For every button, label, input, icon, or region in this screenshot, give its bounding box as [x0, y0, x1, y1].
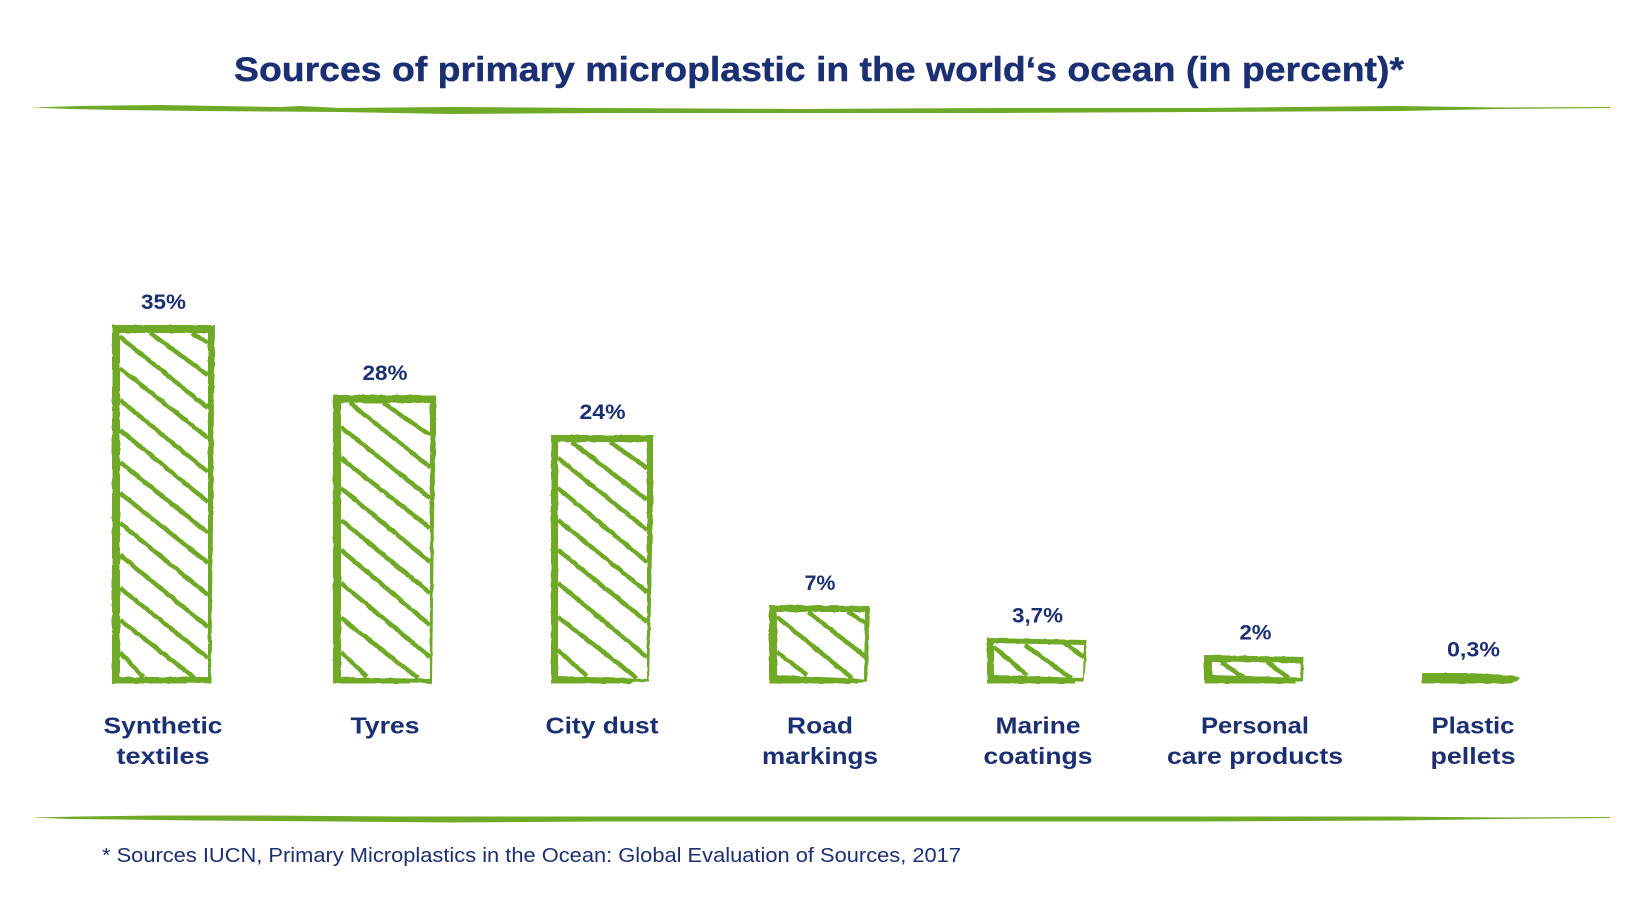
- value label 35%: 35%: [141, 291, 186, 314]
- category label: [984, 712, 1092, 769]
- category label: City dust: [546, 712, 659, 738]
- hatched bar: [551, 435, 653, 684]
- value label 2%: 2%: [1240, 622, 1272, 644]
- value label 7%: 7%: [804, 572, 836, 595]
- category label: textiles: [116, 743, 210, 769]
- bar chart: [104, 291, 1520, 769]
- category label: [762, 712, 878, 769]
- hatched bar: [769, 605, 870, 684]
- category label: care products: [1167, 743, 1343, 769]
- category label: markings: [762, 743, 878, 769]
- bar: marine coatings 3,7%: [984, 604, 1092, 769]
- solid bar: [1422, 673, 1520, 684]
- category label: [1167, 712, 1343, 769]
- bar: tyres 28%: [333, 362, 436, 738]
- category label: Road: [787, 712, 853, 738]
- value label 28%: 28%: [362, 362, 408, 385]
- title: Sources of primary microplastic in the world‘s ocean (in percent)*: [234, 51, 1405, 89]
- bar: city dust 24%: [546, 401, 659, 738]
- bar: plastic pellets 0,3%: [1422, 638, 1520, 769]
- hatched bar: [987, 638, 1086, 684]
- category label: Personal: [1201, 712, 1309, 738]
- hatched bar: [1204, 655, 1304, 684]
- value label 0,3%: 0,3%: [1447, 638, 1500, 662]
- hatched bar: [112, 325, 215, 684]
- category label: [104, 712, 223, 769]
- bar: road markings 7%: [762, 572, 878, 769]
- top green rule: [31, 105, 1610, 114]
- category label: Tyres: [350, 712, 420, 738]
- category label: [1430, 712, 1516, 769]
- category label: Plastic: [1432, 712, 1515, 738]
- category label: Synthetic: [104, 712, 223, 738]
- value label 3,7%: 3,7%: [1012, 604, 1063, 628]
- category label: coatings: [984, 743, 1092, 769]
- value label 24%: 24%: [580, 401, 626, 424]
- bar: synthetic textiles 35%: [104, 291, 223, 769]
- category label: pellets: [1430, 743, 1516, 769]
- bottom green rule: [31, 816, 1610, 822]
- bar: personal care products 2%: [1167, 622, 1343, 769]
- footnote: * Sources IUCN, Primary Microplastics in the Ocean: Global Evaluation of Sources, 2017: [102, 845, 961, 867]
- category label: Marine: [996, 712, 1080, 738]
- hatched bar: [333, 395, 436, 684]
